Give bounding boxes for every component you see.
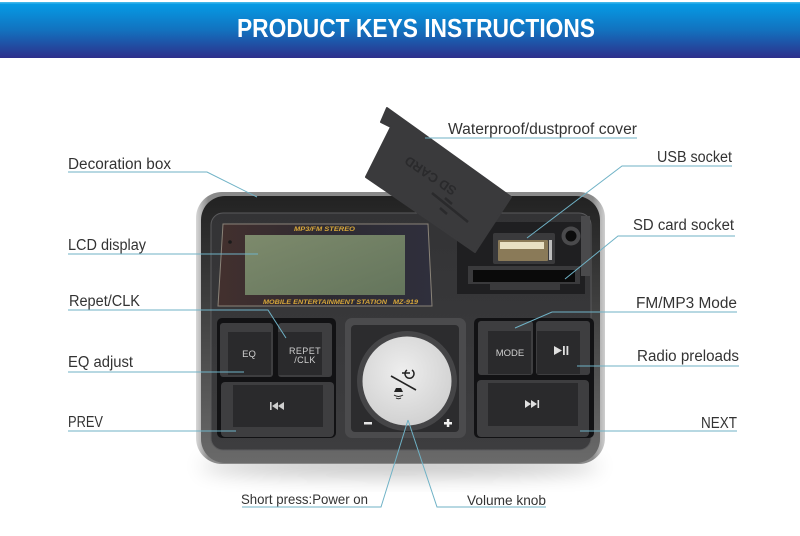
- LCD display: [218, 224, 432, 306]
- callout: PREV: PREV: [68, 414, 104, 431]
- MODE button: MODE: [496, 348, 524, 359]
- callout: USB socket: USB socket: [657, 149, 733, 166]
- callout: SD card socket: SD card socket: [633, 217, 735, 234]
- USB socket: [493, 233, 555, 264]
- callout: Repet/CLK: Repet/CLK: [69, 293, 141, 310]
- callout: Radio preloads: Radio preloads: [637, 348, 739, 365]
- callout: Decoration box: [68, 156, 257, 197]
- waterproof cover: SD CARD: [402, 153, 459, 199]
- callout: Volume knob: [408, 420, 546, 508]
- header banner: [0, 2, 800, 58]
- callout: EQ adjust: EQ adjust: [68, 354, 134, 371]
- LCD top label: MP3/FM STEREO: [294, 226, 356, 233]
- waterproof cover: [366, 108, 511, 252]
- callout: FM/MP3 Mode: [515, 295, 737, 328]
- SD card socket: [468, 266, 580, 290]
- LCD display: MZ-919: [393, 300, 419, 306]
- EQ button: EQ: [242, 349, 256, 360]
- LCD bottom label: MOBILE ENTERTAINMENT STATION: [263, 299, 387, 306]
- right top recess: [457, 222, 585, 294]
- MODE button: [478, 321, 533, 375]
- minus sign: [364, 422, 372, 424]
- callout: Volume knob: Volume knob: [467, 492, 546, 508]
- callout: Short press:Power on: [241, 420, 408, 507]
- audio jack: [562, 226, 580, 246]
- callout: Repet/CLK: [68, 293, 286, 338]
- REPET/CLK button: REPET: [289, 346, 321, 356]
- play/pause button: [536, 321, 590, 375]
- callout: FM/MP3 Mode: FM/MP3 Mode: [636, 295, 737, 312]
- callout: LCD display: LCD display: [68, 237, 146, 254]
- PREV button: [221, 382, 334, 437]
- plus sign: [444, 419, 452, 427]
- outer housing: [196, 192, 605, 464]
- callout: Short press:Power on: Short press:Power on: [241, 491, 368, 507]
- title: PRODUCT KEYS INSTRUCTIONS: [237, 13, 595, 43]
- EQ button: [220, 323, 273, 377]
- volume knob: [345, 318, 466, 438]
- REPET/CLK button: /CLK: [294, 355, 316, 365]
- left button well: [217, 318, 336, 438]
- callout: NEXT: NEXT: [701, 415, 737, 432]
- callout: Decoration box: Decoration box: [68, 156, 171, 173]
- callout: USB socket: [527, 149, 733, 238]
- ground shadow: [200, 456, 600, 476]
- right button well: [474, 318, 594, 438]
- NEXT button: [477, 380, 589, 437]
- device: car audio head unit: [196, 108, 605, 476]
- REPET/CLK button: [278, 323, 332, 377]
- front panel: [211, 213, 591, 450]
- callout: Waterproof/dustproof cover: Waterproof/dustproof cover: [448, 121, 637, 138]
- callout: SD card socket: [565, 217, 735, 279]
